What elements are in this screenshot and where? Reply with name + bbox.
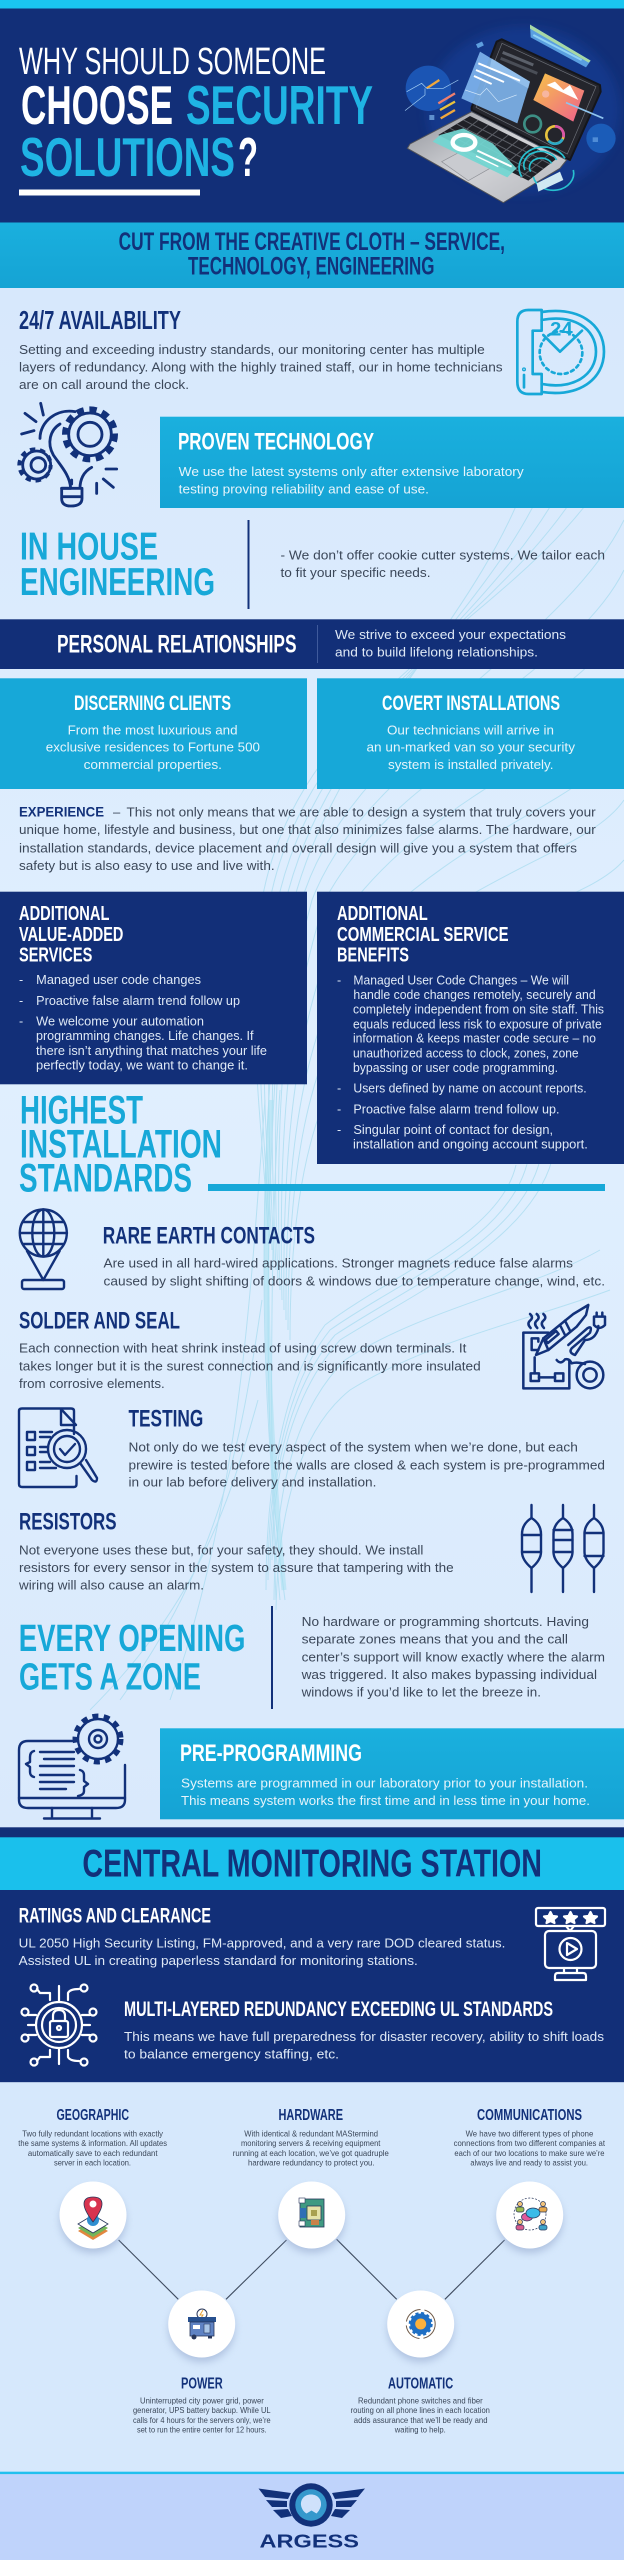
node: automatic: Redundant phone switches and fiber: [358, 2395, 483, 2405]
text block: experience: safety but is also easy to use and live with.: [19, 858, 275, 873]
section: testing: TESTING: [128, 1406, 203, 1433]
panel: personal relationships: [0, 619, 624, 669]
section: central monitoring station: [0, 1827, 624, 2082]
panel: personal relationships: We strive to exceed your expectations: [335, 628, 566, 642]
panel: additional value-added services: there isn’t anything that matches your life: [36, 1044, 267, 1058]
node: communications: connections from two different companies at: [454, 2138, 606, 2148]
panel: additional commercial service benefits: information & keeps master code secure – no: [353, 1032, 596, 1046]
node: power: [133, 2290, 271, 2435]
panel: pre-programming: Systems are programmed in our laboratory prior to your installation.: [181, 1775, 588, 1790]
section: testing: prewire is tested before the walls are closed & each system is pre-programmed: [128, 1457, 605, 1472]
section: solder and seal: [19, 1307, 481, 1391]
panel: additional commercial service benefits: completely independent from on site staff. This: [353, 1003, 604, 1017]
section: every opening gets a zone: GETS A ZONE: [19, 1656, 201, 1698]
panel: additional commercial service benefits: Users defined by name on account reports.: [353, 1082, 587, 1096]
icon: 24 hour clock: 24: [550, 320, 573, 341]
panel: discerning clients: [0, 678, 307, 789]
icon: star rating video: [536, 1908, 605, 1980]
panel: additional value-added services: -: [19, 994, 23, 1008]
icon: globe map pin: [20, 1210, 67, 1289]
node: geographic: GEOGRAPHIC: [56, 2107, 129, 2124]
node: power: generator, UPS battery backup. While UL: [133, 2405, 271, 2415]
node: geographic: server in each location.: [54, 2158, 131, 2168]
section: 24/7 availability: [19, 305, 503, 392]
section: in house engineering: [20, 520, 605, 609]
panel: covert installations: system is installed privately.: [388, 757, 554, 772]
section: rare earth contacts: caused by slight shifting of doors & windows due to temperature change, wind, etc.: [104, 1274, 605, 1289]
node: hardware: running at each location, we’ve got quadruple: [233, 2148, 389, 2158]
node: automatic: AUTOMATIC: [388, 2375, 453, 2392]
icon: people chat: [514, 2198, 547, 2230]
panel: pre-programming: This means system works the first time and in less time in your home.: [181, 1793, 590, 1808]
node: power: calls for 4 hours for the servers only, we’re: [133, 2415, 271, 2425]
logo wing left: [258, 2488, 292, 2518]
connector lines: [119, 2239, 505, 2299]
node: hardware: HARDWARE: [278, 2107, 343, 2124]
panel: additional commercial service benefits: equals reduced less risk to exposure of private: [353, 1017, 602, 1031]
panel: additional value-added services: [0, 892, 307, 1084]
panel: additional value-added services: -: [19, 1015, 23, 1029]
node: power: Uninterrupted city power grid, power: [140, 2395, 264, 2405]
page background: [0, 288, 624, 1828]
logo ring: [289, 2483, 333, 2527]
node: hardware: With identical & redundant MAStermind: [244, 2128, 378, 2138]
ratings and clearance: [19, 1904, 505, 1968]
icon: rotating gear: [406, 2310, 435, 2338]
node: geographic: the same systems & information. All updates: [18, 2138, 167, 2148]
section: every opening gets a zone: No hardware or programming shortcuts. Having: [302, 1614, 589, 1629]
node: geographic: automatically save to each redundant: [28, 2148, 158, 2158]
panel: additional value-added services: perfectly today, we want to change it.: [36, 1058, 248, 1072]
panel: additional value-added services: -: [19, 973, 23, 987]
text block: experience: unique home, lifestyle and business, but one that also minimizes false alarms. The hardware, our: [19, 822, 596, 837]
panel: discerning clients: From the most luxurious and: [68, 722, 238, 737]
icon: soldering iron: [523, 1305, 605, 1388]
panel: additional commercial service benefits: handle code changes remotely, securely and: [353, 988, 596, 1002]
title: CHOOSE: [21, 74, 173, 136]
section: 24/7 availability: Setting and exceeding industry standards, our monitoring center has multiple: [19, 342, 485, 357]
section: testing: in our lab before delivery and installation.: [128, 1475, 376, 1490]
panel: additional commercial service benefits: -: [337, 973, 341, 987]
panel: covert installations: Our technicians will arrive in: [387, 722, 554, 737]
panel: additional value-added services: Managed user code changes: [36, 973, 201, 987]
panel: covert installations: an un-marked van so your security: [366, 740, 576, 755]
section: testing: Not only do we test every aspect of the system when we’re done, but each: [128, 1440, 578, 1455]
section: testing: [128, 1406, 605, 1490]
section: solder and seal: Each connection with heat shrink instead of using screw down terminals. It: [19, 1341, 467, 1356]
icon: resistors: [522, 1505, 604, 1592]
section: rare earth contacts: RARE EARTH CONTACTS: [103, 1222, 315, 1249]
icon: generator: [188, 2309, 216, 2340]
logo: Argess: ARGESS: [260, 2531, 359, 2552]
node: automatic: adds assurance that we’ll be ready and: [354, 2415, 488, 2425]
section: in house engineering: ENGINEERING: [20, 561, 215, 604]
node: automatic: waiting to help.: [394, 2425, 446, 2435]
section: every opening gets a zone: center’s support will know exactly where the alarm: [302, 1649, 605, 1664]
node: automatic: routing on all phone lines in each location: [351, 2405, 490, 2415]
heading: highest installation standards: [19, 1088, 605, 1201]
node: hardware: monitoring servers & receiving equipment: [241, 2138, 381, 2148]
heading: highest installation standards: STANDARDS: [19, 1157, 192, 1201]
section: resistors: RESISTORS: [19, 1508, 117, 1535]
section: resistors: Not everyone uses these but, for your safety, they should. We install: [19, 1542, 424, 1557]
node: communications: COMMUNICATIONS: [477, 2107, 582, 2124]
node: communications: We have two different types of phone: [466, 2128, 593, 2138]
panel: additional commercial service benefits: -: [337, 1102, 341, 1116]
panel: proven technology: [160, 417, 624, 508]
section: every opening gets a zone: windows if you’d like to let the breeze in.: [301, 1685, 541, 1700]
panel: discerning clients: commercial properties.: [84, 757, 222, 772]
subtitle band: [0, 222, 624, 288]
subtitle band: TECHNOLOGY, ENGINEERING: [188, 252, 434, 280]
title: ?: [238, 126, 258, 188]
section: every opening gets a zone: was triggered. It also makes bypassing individual: [301, 1667, 597, 1682]
section: rare earth contacts: [103, 1222, 605, 1289]
section: solder and seal: takes longer but it is the surest connection and is significantly more insulated: [19, 1358, 481, 1373]
title underline: [19, 190, 200, 196]
section: resistors: [18, 1508, 454, 1593]
text block: experience: installation standards, device placement and overall design will give you a system that offers: [19, 840, 578, 855]
panel: pre-programming: PRE-PROGRAMMING: [180, 1740, 362, 1767]
panel: additional value-added services: ADDITIONAL: [19, 903, 109, 925]
icon: layered map pin: [78, 2197, 108, 2240]
panel: additional value-added services: programming changes. Life changes. If: [36, 1029, 254, 1043]
text block: experience: –: [113, 805, 121, 820]
multi-layered redundancy: [124, 1998, 604, 2062]
panel: additional commercial service benefits: Proactive false alarm trend follow up.: [353, 1102, 560, 1116]
section: 24/7 availability: layers of redundancy. Along with the highly trained staff, our in home technicians: [19, 359, 503, 374]
heading: highest installation standards: HIGHEST: [20, 1088, 143, 1132]
multi-layered redundancy: to balance emergency staffing, etc.: [124, 2048, 339, 2062]
panel: covert installations: [317, 678, 624, 789]
icon: circuit padlock: [22, 1984, 96, 2066]
panel: additional commercial service benefits: BENEFITS: [337, 945, 409, 967]
footer: [0, 2472, 624, 2560]
section: 24/7 availability: are on call around the clock.: [19, 377, 189, 392]
panel: proven technology: PROVEN TECHNOLOGY: [178, 428, 374, 455]
section: rare earth contacts: Are used in all hard-wired applications. Stronger magnets reduce false alarms: [104, 1256, 574, 1271]
panel: additional value-added services: We welcome your automation: [36, 1015, 204, 1029]
node: power: set to run the entire center for 12 hours.: [137, 2425, 267, 2435]
section: 24/7 availability: 24/7 AVAILABILITY: [19, 305, 181, 335]
panel: additional value-added services: SERVICES: [19, 945, 92, 967]
icon: circuit board: [299, 2198, 324, 2227]
panel: discerning clients: exclusive residences to Fortune 500: [46, 740, 260, 755]
node: communications: each of our two locations to make sure we’re: [454, 2148, 605, 2158]
panel: additional commercial service benefits: Singular point of contact for design,: [353, 1123, 553, 1137]
panel: additional commercial service benefits: installation and ongoing account support.: [353, 1138, 588, 1152]
panel: additional commercial service benefits: -: [337, 1123, 341, 1137]
node: hardware: hardware redundancy to protect you.: [248, 2158, 374, 2168]
node: power: POWER: [181, 2375, 223, 2392]
section: resistors: wiring will also cause an alarm.: [18, 1578, 204, 1593]
panel: additional commercial service benefits: Managed User Code Changes – We will: [353, 973, 569, 987]
section: in house engineering: - We don’t offer cookie cutter systems. We tailor each: [280, 547, 605, 562]
title: SECURITY: [186, 74, 373, 136]
panel: additional value-added services: VALUE-ADDED: [19, 924, 123, 946]
icon: 24 hour clock: [517, 310, 604, 394]
multi-layered redundancy: This means we have full preparedness for disaster recovery, ability to shift loads: [124, 2030, 604, 2044]
logo: Argess: [258, 2483, 365, 2552]
panel: pre-programming: [160, 1728, 624, 1819]
redundancy diagram: [0, 2082, 624, 2472]
section: in house engineering: to fit your specific needs.: [280, 565, 430, 580]
panel: additional commercial service benefits: bypassing or user code programming.: [353, 1061, 558, 1075]
text block: experience: EXPERIENCE: [19, 805, 104, 820]
title: WHY SHOULD SOMEONE: [19, 40, 326, 82]
section: every opening gets a zone: [19, 1606, 605, 1709]
icon: checklist with magnifier: [19, 1408, 97, 1487]
illustration: laptop with security dashboards: [405, 25, 620, 203]
panel: additional commercial service benefits: -: [337, 1082, 341, 1096]
panel: additional commercial service benefits: [317, 892, 624, 1164]
panel: proven technology: testing proving reliability and ease of use.: [179, 481, 429, 496]
text block: experience: This not only means that we are able to design a system that truly covers your: [126, 805, 596, 820]
top accent stripe: [0, 0, 624, 8]
panel: additional commercial service benefits: ADDITIONAL: [337, 903, 428, 925]
panel: proven technology: We use the latest systems only after extensive laboratory: [179, 464, 524, 479]
logo wing right: [331, 2488, 365, 2518]
section: every opening gets a zone: separate zones means that you and the call: [302, 1632, 568, 1647]
text block: experience: [19, 805, 596, 873]
panel: personal relationships: and to build lifelong relationships.: [335, 645, 538, 659]
node: communications: [454, 2107, 606, 2253]
icon: light bulb with gears: [19, 403, 117, 506]
title: SOLUTIONS: [20, 126, 235, 188]
panel: discerning clients: DISCERNING CLIENTS: [74, 692, 231, 715]
ratings and clearance: RATINGS AND CLEARANCE: [19, 1904, 211, 1927]
section: solder and seal: from corrosive elements.: [19, 1376, 165, 1391]
panel: additional value-added services: Proactive false alarm trend follow up: [36, 994, 240, 1008]
heading: highest installation standards: INSTALLATION: [20, 1122, 222, 1166]
ratings and clearance: Assisted UL in creating paperless standard for monitoring stations.: [19, 1954, 418, 1968]
header panel: [0, 8, 624, 222]
panel: additional commercial service benefits: unauthorized access to clock, zones, zone: [353, 1046, 579, 1060]
panel: additional commercial service benefits: COMMERCIAL SERVICE: [337, 924, 508, 946]
node: geographic: [18, 2107, 167, 2253]
node: automatic: [351, 2290, 490, 2435]
node: hardware: [233, 2107, 389, 2253]
section: solder and seal: SOLDER AND SEAL: [19, 1307, 180, 1334]
section: resistors: resistors for every sensor in the system to assure that tampering with the: [19, 1560, 454, 1575]
title: [19, 40, 373, 188]
panel: personal relationships: PERSONAL RELATIONSHIPS: [57, 630, 296, 658]
node: geographic: Two fully redundant locations with exactly: [22, 2128, 164, 2138]
node: communications: always live and ready to assist you.: [470, 2158, 588, 2168]
icon: computer with gear and code: [19, 1716, 125, 1818]
section: every opening gets a zone: EVERY OPENING: [19, 1618, 246, 1660]
section: in house engineering: IN HOUSE: [20, 525, 158, 568]
ratings and clearance: UL 2050 High Security Listing, FM-approved, and a very rare DOD cleared status.: [19, 1936, 505, 1950]
